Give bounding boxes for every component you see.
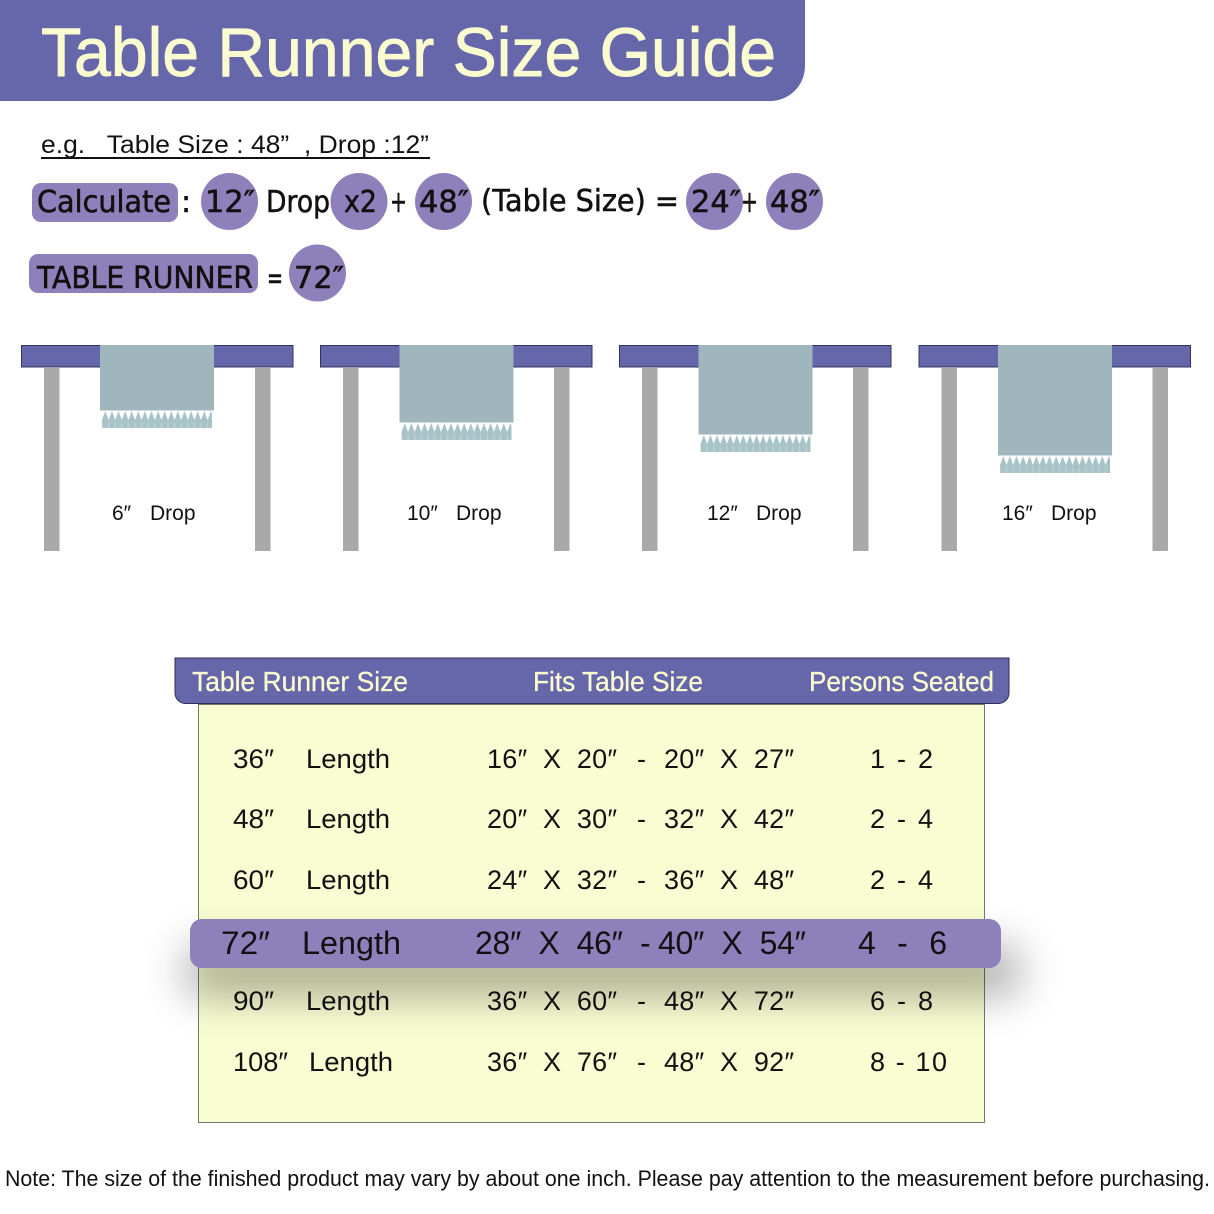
diagram: 10 inch drop: 10″: [407, 502, 438, 525]
diagram: 6 inch drop: Drop: [150, 502, 196, 525]
12 inch badge: 12″: [205, 185, 255, 220]
diagram: 6 inch drop: 6″: [112, 502, 132, 525]
calculation formula: [32, 173, 823, 230]
row: 90 inch: Length: [306, 986, 390, 1016]
row: 72 inch highlighted: Length: [302, 925, 401, 961]
diagram: 10 inch drop: [320, 345, 592, 551]
example line: e.g. Table Size : 48” , Drop :12”: [41, 131, 429, 159]
row: 108 inch: [233, 1047, 947, 1077]
table runner result: [29, 244, 346, 302]
row: 48 inch: 32″ X 42″: [664, 804, 794, 834]
48 inch badge: [766, 173, 823, 230]
48 inch badge: [415, 173, 472, 230]
highlight shadow: [185, 945, 1020, 997]
plus: +: [390, 185, 407, 220]
diagram: 16 inch drop: 16″: [1002, 502, 1033, 525]
row: 36 inch: [233, 744, 933, 774]
72 inch badge: 72″: [294, 261, 344, 296]
row: 60 inch: 24″ X 32″: [487, 865, 617, 895]
row: 48 inch: 2 - 4: [870, 804, 933, 834]
row: 108 inch: 108″: [233, 1047, 288, 1077]
row: 60 inch: 36″ X 48″: [664, 865, 794, 895]
row: 72 inch highlighted: 4 - 6: [858, 925, 947, 961]
row: 108 inch: -: [637, 1047, 646, 1077]
table size words: (Table Size) =: [481, 184, 679, 219]
table header: Fits Table Size: [533, 666, 703, 697]
row: 36 inch: Length: [306, 744, 390, 774]
row: 90 inch: 48″ X 72″: [664, 986, 794, 1016]
row: 36 inch: 16″ X 20″: [487, 744, 617, 774]
colon: :: [181, 185, 191, 220]
row: 48 inch: 20″ X 30″: [487, 804, 617, 834]
table runner label: TABLE RUNNER: [36, 261, 253, 296]
row: 108 inch: Length: [309, 1047, 393, 1077]
row: 108 inch: 36″ X 76″: [487, 1047, 617, 1077]
row: 48 inch: 48″: [233, 804, 274, 834]
row: 36 inch: 36″: [233, 744, 274, 774]
row: 90 inch: 6 - 8: [870, 986, 933, 1016]
row: 36 inch: -: [637, 744, 646, 774]
row: 36 inch: 20″ X 27″: [664, 744, 794, 774]
title banner: Table Runner Size Guide: [41, 14, 776, 91]
calculate label: Calculate: [37, 185, 171, 220]
table header: [175, 658, 1009, 704]
48 inch badge: 48″: [419, 185, 469, 220]
row: 72 inch highlighted: -: [640, 925, 651, 961]
row: 60 inch: 2 - 4: [870, 865, 933, 895]
diagram: 12 inch drop: 12″: [707, 502, 738, 525]
diagram: 12 inch drop: [620, 345, 891, 551]
size table: [175, 658, 1020, 1122]
diagram: 16 inch drop: [919, 345, 1190, 551]
equals: =: [267, 261, 283, 296]
row: 72 inch highlighted: 72″: [221, 925, 270, 961]
row: 48 inch: [233, 804, 933, 834]
row: 60 inch: Length: [306, 865, 390, 895]
row: 60 inch: [233, 865, 933, 895]
24 inch badge: [686, 173, 743, 230]
row: 108 inch: 8 - 10: [870, 1047, 947, 1077]
row: 90 inch: [233, 986, 933, 1016]
footnote: Note: The size of the finished product may vary by about one inch. Please pay attention to the measurement before purchasing.: [5, 1166, 1210, 1191]
table header: Table Runner Size: [192, 666, 408, 697]
plus: +: [741, 185, 758, 220]
12 inch badge: [201, 173, 258, 230]
x2 badge: [330, 173, 388, 230]
row: 60 inch: -: [637, 865, 646, 895]
row: 72 inch highlighted: [190, 919, 1001, 968]
row: 90 inch: 90″: [233, 986, 274, 1016]
row: 108 inch: 48″ X 92″: [664, 1047, 794, 1077]
row: 48 inch: Length: [306, 804, 390, 834]
drop word: Drop: [266, 185, 330, 220]
row: 90 inch: -: [637, 986, 646, 1016]
diagram: 6 inch drop: [22, 345, 293, 551]
24 inch badge: 24″: [691, 185, 741, 220]
row: 48 inch: -: [637, 804, 646, 834]
72 inch badge: [289, 244, 346, 302]
row: 60 inch: 60″: [233, 865, 274, 895]
diagram: 10 inch drop: Drop: [456, 502, 502, 525]
diagram: 16 inch drop: Drop: [1051, 502, 1097, 525]
row: 72 inch highlighted: 40″ X 54″: [658, 925, 806, 961]
table header: Persons Seated: [809, 666, 994, 697]
row: 72 inch highlighted: 28″ X 46″: [475, 925, 623, 961]
diagram: 12 inch drop: Drop: [756, 502, 802, 525]
row: 36 inch: 1 - 2: [870, 744, 933, 774]
x2 badge: x2: [344, 185, 377, 220]
table body: [198, 704, 984, 1122]
row: 90 inch: 36″ X 60″: [487, 986, 617, 1016]
48 inch badge: 48″: [770, 185, 820, 220]
